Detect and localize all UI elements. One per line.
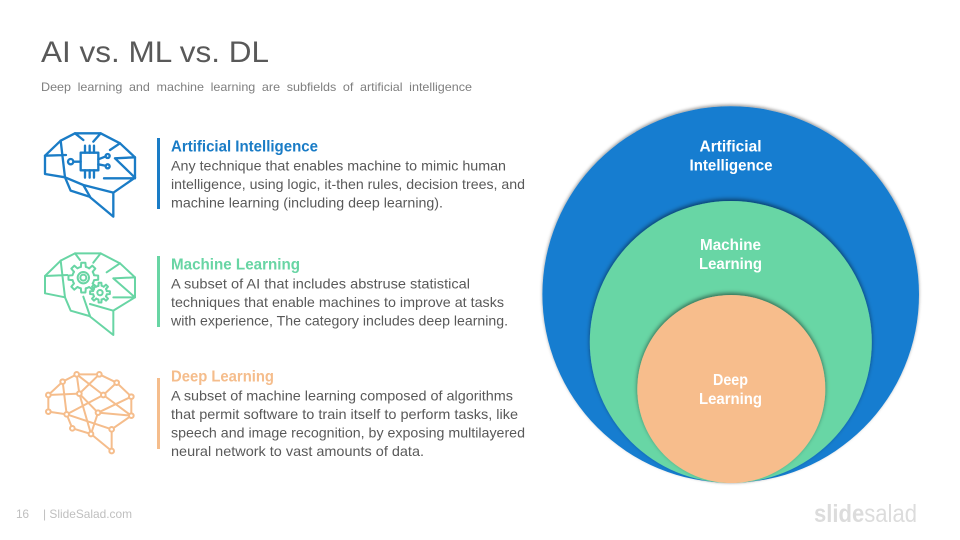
accent bar: artificial intelligence: [157, 138, 160, 209]
text block: machine learning: A subset of AI that includes abstruse statistical: [171, 276, 470, 292]
accent bar: deep learning: [157, 378, 160, 449]
text block: machine learning: techniques that enable machines to improve at tasks: [171, 294, 504, 310]
icon: neural network brain: [46, 372, 134, 453]
accent bar: machine learning: [157, 256, 160, 327]
icon: brain with gears: [45, 253, 135, 335]
title: AI vs. ML vs. DL: [41, 36, 269, 69]
icon: brain with chip: [45, 133, 135, 217]
text block: deep learning: speech and image recognition, by exposing multilayered: [171, 424, 525, 440]
text block: machine learning: [170, 256, 508, 328]
text block: artificial intelligence: Any technique that enables machine to mimic human: [171, 158, 506, 174]
circle: machine learning: [590, 201, 872, 483]
text block: deep learning: that permit software to train itself to perform tasks, like: [171, 406, 518, 422]
circle: deep learning: Learning: [699, 391, 762, 408]
text block: deep learning: A subset of machine learning composed of algorithms: [171, 388, 513, 404]
text block: artificial intelligence: machine learning (including deep learning).: [171, 194, 443, 210]
footer logo: slidesalad: [814, 500, 917, 528]
text block: artificial intelligence: intelligence, using logic, it-then rules, decision trees, and: [171, 176, 525, 192]
text block: deep learning: [171, 368, 525, 459]
circle: machine learning: Learning: [699, 256, 762, 273]
text block: deep learning: neural network to vast amounts of data.: [171, 443, 424, 459]
circle: deep learning: Deep: [713, 372, 748, 389]
page number: 16: [16, 507, 29, 521]
nested circle diagram: [542, 106, 919, 483]
text block: artificial intelligence: [171, 138, 525, 210]
circle: artificial intelligence: [542, 106, 919, 483]
circle: deep learning: [637, 295, 825, 483]
circle: artificial intelligence: Artificial: [700, 138, 762, 156]
subtitle: Deep learning and machine learning are subfields of artificial intelligence: [41, 80, 472, 94]
text block: machine learning: with experience, The category includes deep learning.: [170, 312, 508, 328]
text block: machine learning: Machine Learning: [171, 256, 300, 274]
footer site name: | SlideSalad.com: [43, 507, 132, 521]
text block: artificial intelligence: Artificial Intelligence: [171, 138, 318, 156]
text block: deep learning: Deep Learning: [171, 368, 274, 386]
circle: machine learning: Machine: [700, 237, 761, 254]
circle: artificial intelligence: Intelligence: [690, 158, 773, 174]
